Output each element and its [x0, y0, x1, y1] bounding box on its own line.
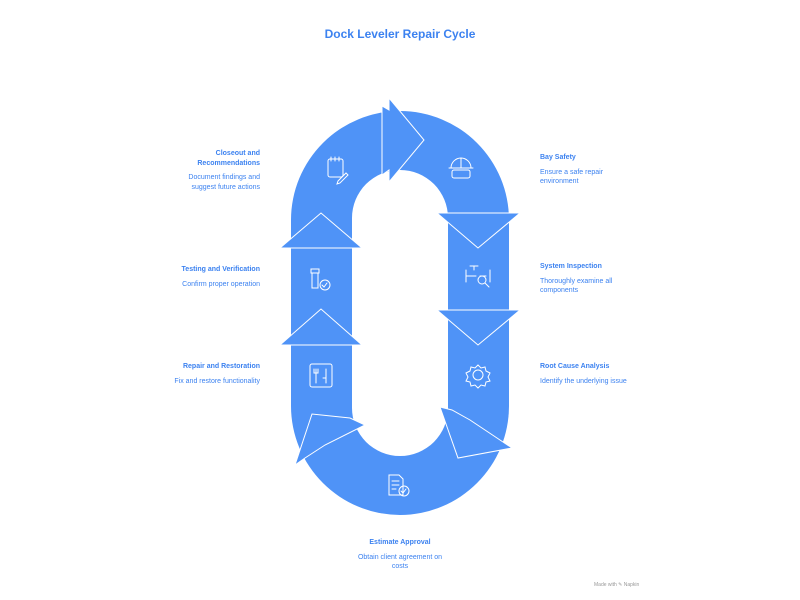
arrow heads [382, 98, 424, 182]
text: system inspection [540, 262, 612, 294]
text: repair: Repair and Restoration [183, 363, 260, 370]
title: Dock Leveler Repair Cycle [325, 27, 475, 41]
text: closeout: Recommendations [197, 160, 260, 166]
text: system inspection: components [540, 287, 578, 294]
icon: hard hat [449, 158, 473, 178]
band [291, 111, 509, 515]
text: repair: Fix and restore functionality [174, 378, 260, 384]
icon: tools panel [310, 364, 332, 387]
icon: gear bulb [466, 365, 490, 388]
text: estimate: Obtain client agreement on [358, 554, 442, 560]
text: repair [174, 362, 260, 384]
text: estimate: costs [392, 563, 408, 570]
footer: Made with ✎ Napkin [594, 582, 639, 588]
text: root cause [540, 362, 627, 384]
text: closeout: Document findings and [188, 174, 260, 181]
icon: document check [389, 475, 409, 496]
text: closeout: suggest future actions [192, 184, 260, 190]
text: testing [182, 266, 260, 288]
text: bay safety: Ensure a safe repair [540, 168, 603, 176]
text: estimate: Estimate Approval [369, 539, 431, 546]
text: testing: Confirm proper operation [182, 280, 260, 288]
text: closeout [188, 150, 260, 190]
text: root cause: Root Cause Analysis [540, 363, 609, 370]
text: system inspection: Thoroughly examine all [540, 278, 612, 284]
text: closeout: Closeout and [216, 150, 260, 157]
text: system inspection: System Inspection [540, 263, 602, 270]
text: testing: Testing and Verification [182, 266, 260, 273]
icon: notepad [328, 157, 348, 184]
text: bay safety: Bay Safety [540, 154, 576, 161]
text: estimate [358, 538, 442, 570]
icon: test tube [311, 269, 330, 290]
icon: pipe inspection [466, 266, 490, 287]
text: bay safety [540, 154, 603, 185]
text: root cause: Identify the underlying issue [540, 378, 627, 384]
text: bay safety: environment [540, 178, 579, 185]
